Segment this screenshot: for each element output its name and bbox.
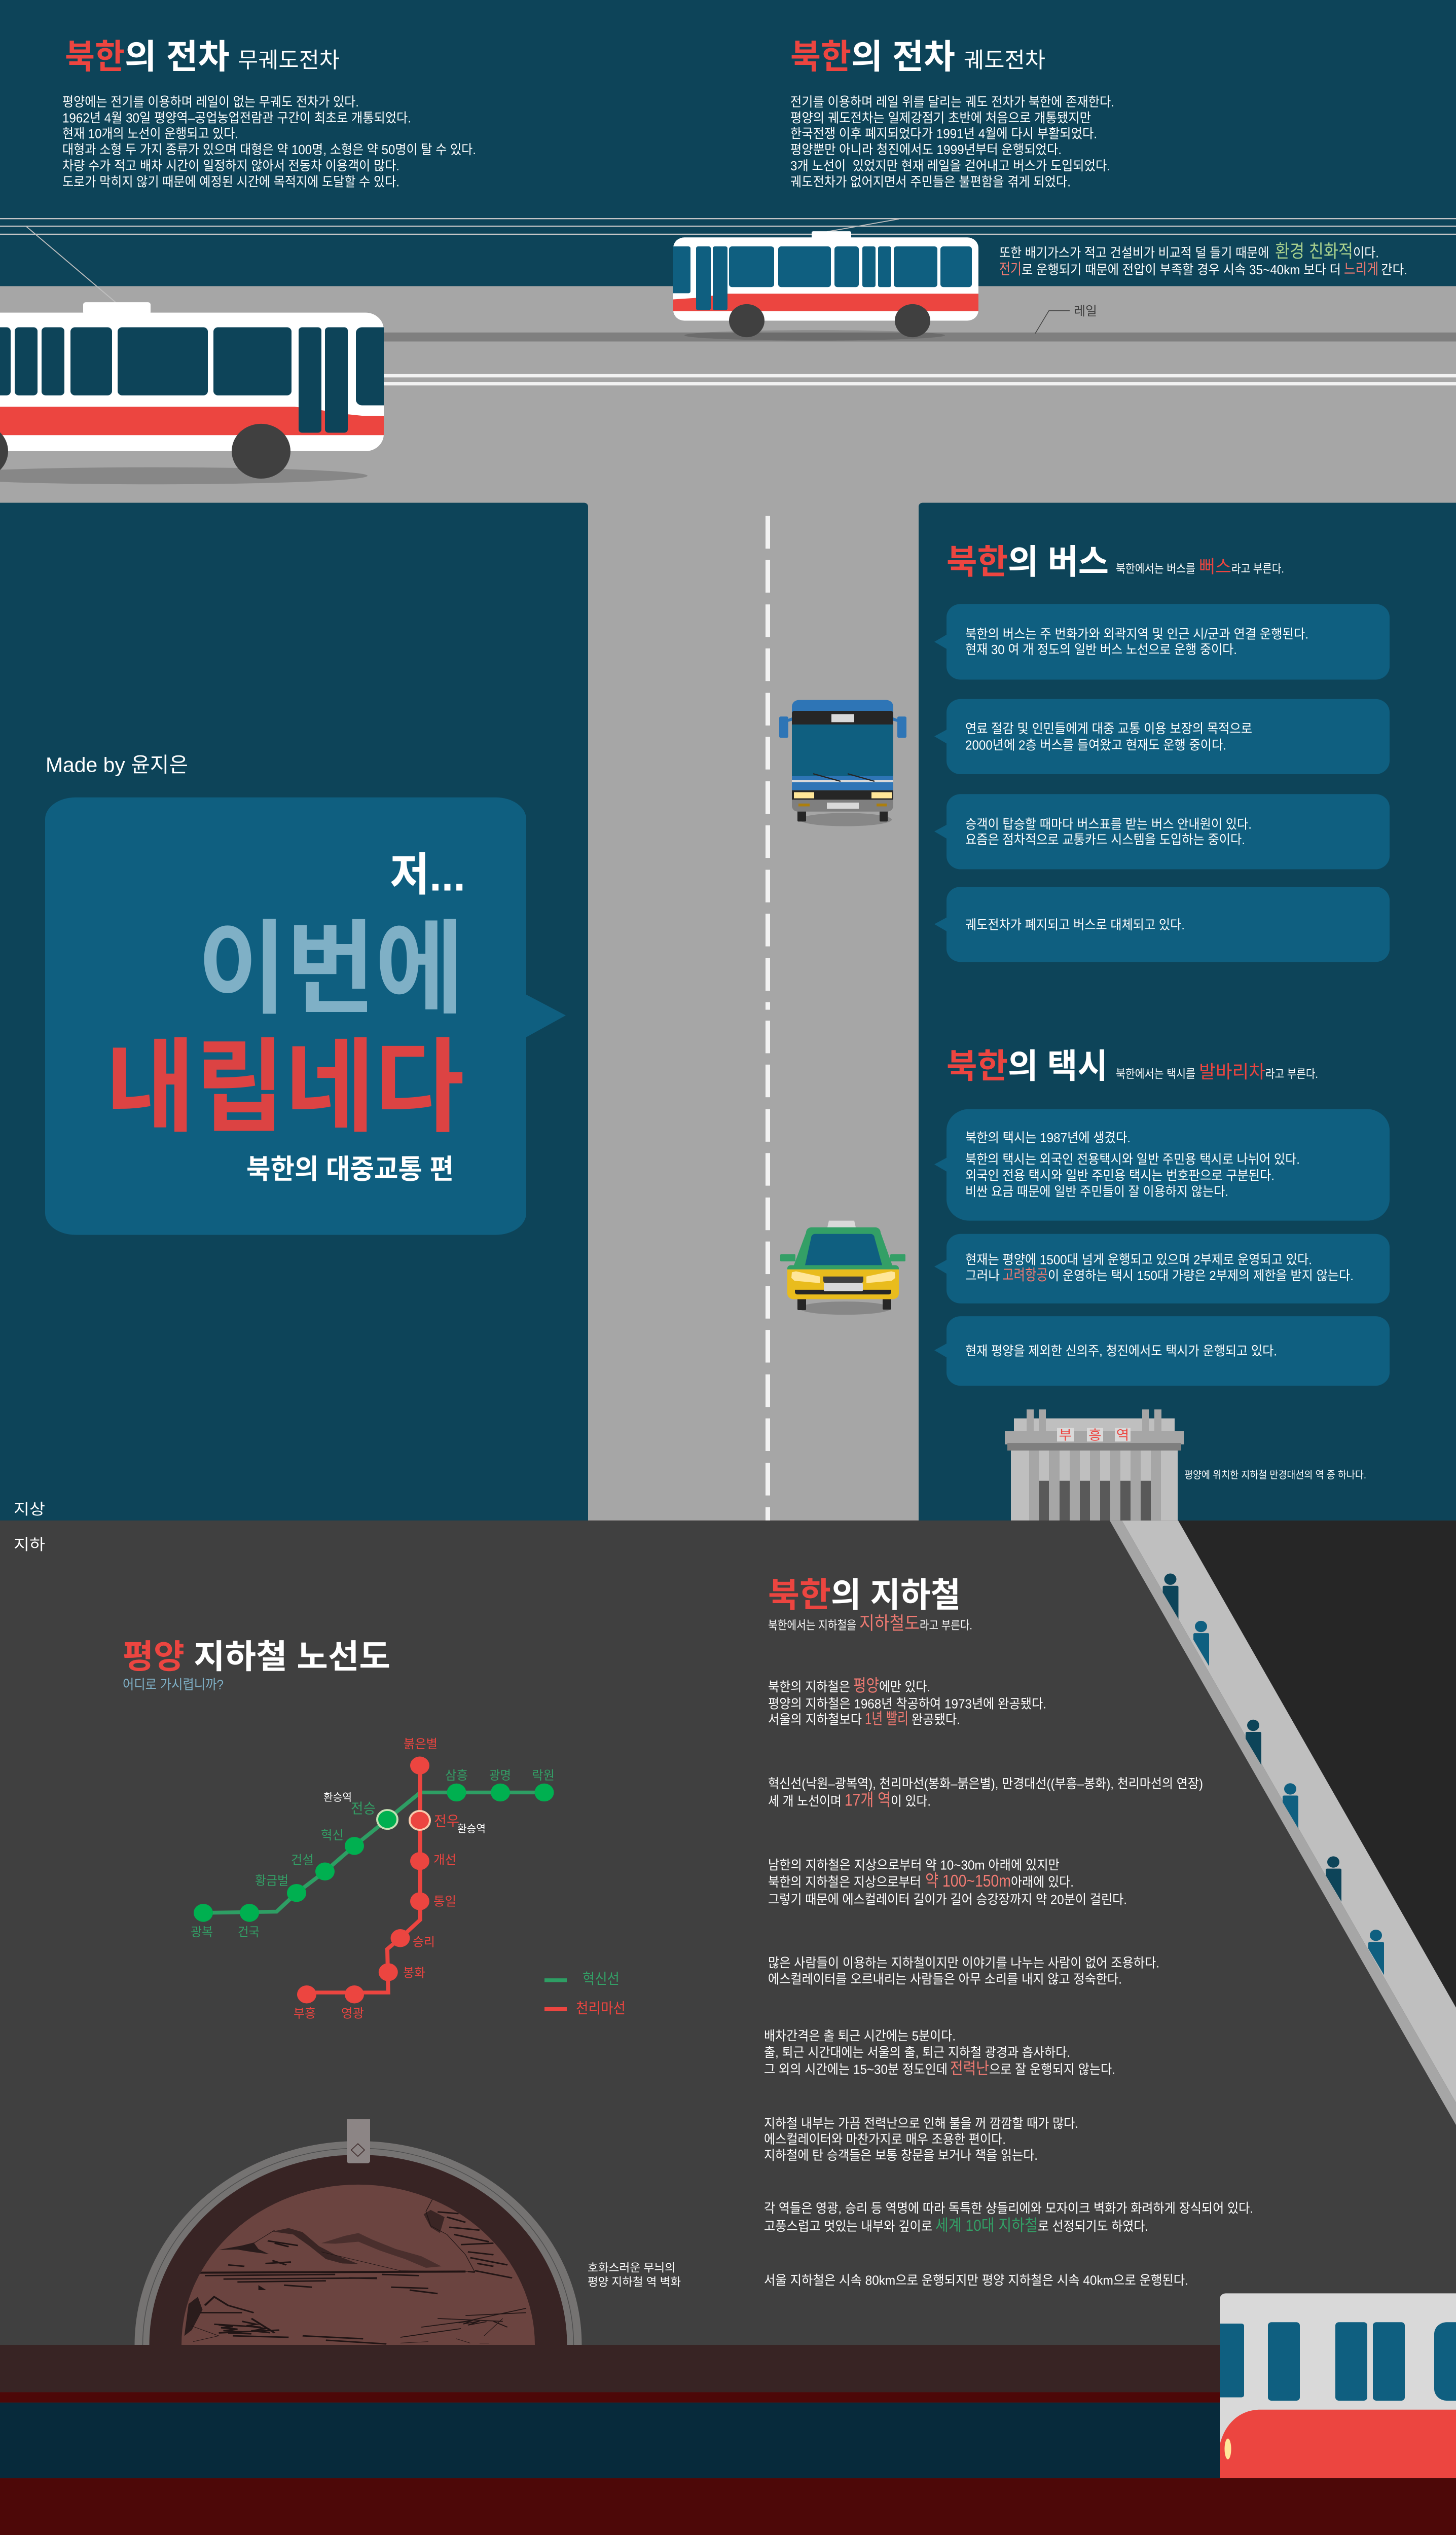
heading: subway map: 어디로 가시렵니까? — [123, 1677, 224, 1692]
top panel: sky background — [0, 0, 1456, 286]
label: rail: 레일 — [1074, 304, 1097, 318]
label: above ground: 지상 — [14, 1501, 45, 1518]
station labels: 락원 — [532, 1769, 555, 1783]
callout: bus 3: 요즘은 점차적으로 교통카드 시스템을 도입하는 중이다. — [965, 832, 1245, 847]
icon: arch keystone — [347, 2119, 370, 2163]
body text: tram: 한국전쟁 이후 폐지되었다가 1991년 4월에 다시 부활되었다. — [790, 126, 1097, 141]
rail strip — [0, 333, 1456, 342]
callout: taxi 1 — [934, 1109, 1390, 1221]
heading: taxi: 라고 부른다. — [1265, 1068, 1318, 1081]
callout: taxi 3 — [934, 1316, 1390, 1386]
text block: interior: 지하철에 탄 승객들은 보통 창문을 보거나 책을 읽는다. — [764, 2148, 1038, 2163]
text block: Pyongyang only — [768, 1676, 1046, 1727]
station labels — [191, 1737, 555, 2020]
body text: tram: 3개 노선이 있었지만 현재 레일을 걷어내고 버스가 도입되었다. — [790, 158, 1110, 173]
heading: subway: 북한에서는 지하철을 — [768, 1619, 856, 1632]
line: Hyeoksin green — [194, 1784, 554, 1922]
callout: taxi 1: 비싼 요금 때문에 일반 주민들이 잘 이용하지 않는다. — [965, 1184, 1228, 1199]
callout: taxi 1: 북한의 택시는 1987년에 생겼다. — [965, 1130, 1131, 1145]
main title: 북한의 대중교통 편 — [246, 1153, 454, 1184]
callout: environment note: 이다. — [1353, 245, 1379, 260]
callout: environment note: 또한 배기가스가 적고 건설비가 비교적 덜 들기 때문에 — [999, 245, 1272, 260]
station labels: 환승역 — [457, 1823, 486, 1835]
main title: 내립네다 — [105, 1031, 464, 1145]
callout: bus 2 — [934, 699, 1390, 774]
callout: bus 4: 궤도전차가 폐지되고 버스로 대체되고 있다. — [965, 917, 1185, 932]
text block: lines: 이 있다. — [891, 1793, 931, 1808]
body text: trackless trolley — [62, 94, 476, 189]
text block: headway: 그 외의 시간에는 15~30분 정도인데 — [764, 2061, 948, 2077]
text block: interior: 에스컬레이터와 마찬가지로 매우 조용한 편이다. — [764, 2131, 1006, 2147]
text block: stations — [764, 2201, 1253, 2234]
text block: headway — [764, 2028, 1115, 2077]
underground background — [0, 1520, 1456, 2535]
station labels: 건설 — [291, 1854, 314, 1867]
heading: subway — [768, 1576, 972, 1633]
station name: 역 — [1116, 1427, 1129, 1442]
station labels: 부흥 — [294, 2007, 316, 2020]
callout: environment note: 로 운행되기 때문에 전압이 부족할 경우 시속 35~40km 보다 더 — [1022, 262, 1341, 277]
text block: depth: 약 100~150m — [925, 1871, 1011, 1891]
callout: bus 2: 2000년에 2층 버스를 들여왔고 현재도 운행 중이다. — [965, 737, 1226, 752]
text block: Pyongyang only: 에만 있다. — [879, 1679, 930, 1694]
heading: trackless trolley: 북한 — [65, 38, 125, 76]
icon: taxi — [780, 1221, 905, 1315]
heading: taxi: 북한 — [947, 1047, 1008, 1085]
text block: depth: 북한의 지하철은 지상으로부터 — [768, 1874, 921, 1890]
callout: environment note: 느리게 — [1344, 261, 1378, 278]
heading: bus: 뻐스 — [1199, 557, 1231, 576]
callout: taxi 2: 이 운영하는 택시 150대 가량은 2부제의 제한을 받지 않는다. — [1048, 1268, 1354, 1283]
callout: taxi 1: 북한의 택시는 외국인 전용택시와 일반 주민용 택시로 나뉘어 있다. — [965, 1152, 1300, 1167]
callout: bus 2: 연료 절감 및 인민들에게 대중 교통 이용 보장의 목적으로 — [965, 721, 1252, 736]
legend: 혁신선 — [583, 1971, 620, 1987]
text block: headway: 출, 퇴근 시간대에는 서울의 출, 퇴근 지하철 광경과 흡사하다. — [764, 2045, 1070, 2060]
caption: mural — [588, 2261, 681, 2288]
credit: Made by 윤지은 — [46, 753, 188, 777]
callout: taxi 2 — [934, 1234, 1390, 1303]
speech bubble — [45, 798, 566, 1235]
caption: mural: 호화스러운 무늬의 — [588, 2261, 675, 2274]
text block: Pyongyang only: 서울의 지하철보다 — [768, 1712, 862, 1727]
heading: subway: 북한 — [768, 1576, 831, 1614]
station name: 부 — [1059, 1427, 1072, 1442]
text block: lines — [768, 1776, 1203, 1809]
text block: headway: 배차간격은 출 퇴근 시간에는 5분이다. — [764, 2028, 956, 2043]
callout: taxi 2: 그러나 — [965, 1268, 1000, 1283]
callout: environment note — [999, 241, 1407, 278]
heading: taxi: 의 택시 — [1008, 1047, 1108, 1085]
main title: 이번에 — [198, 913, 464, 1027]
heading: tram — [790, 38, 1045, 76]
heading: bus: 북한 — [947, 543, 1008, 581]
heading: tram: 의 전차 — [851, 38, 955, 76]
station labels: 전승 — [351, 1801, 376, 1817]
text block: headway: 전력난 — [950, 2059, 989, 2077]
heading: subway map: 지하철 노선도 — [194, 1639, 390, 1676]
icon: Buheung station building — [1005, 1409, 1184, 1520]
heading: tram: 북한 — [790, 38, 851, 76]
legend: 천리마선 — [576, 2001, 626, 2017]
section: tram text — [790, 38, 1114, 189]
road surface — [0, 286, 1456, 1520]
body text: trackless trolley: 차량 수가 적고 배차 시간이 일정하지 않아서 전동차 이용객이 많다. — [62, 158, 399, 173]
callout: environment note: 간다. — [1381, 262, 1407, 277]
body text: trackless trolley: 대형과 소형 두 가지 종류가 있으며 대형은 약 100명, 소형은 약 50명이 탈 수 있다. — [62, 142, 476, 157]
body text: tram: 평양의 궤도전차는 일제강점기 초반에 처음으로 개통됐지만 — [790, 110, 1091, 125]
panel: bus and taxi — [919, 503, 1456, 1520]
callout: bus 1: 현재 30 여 개 정도의 일반 버스 노선으로 운행 중이다. — [965, 642, 1237, 657]
station labels: 삼흥 — [445, 1769, 468, 1783]
callout: taxi 2: 고려항공 — [1002, 1266, 1048, 1284]
text block: depth: 그렇기 때문에 에스컬레이터 길이가 길어 승강장까지 약 20분이 걸린다. — [768, 1892, 1127, 1907]
mural landscape — [185, 2198, 526, 2344]
passengers — [1163, 1574, 1384, 1975]
icon: escalator with passengers — [1110, 1520, 1456, 2125]
heading: subway map — [123, 1639, 390, 1692]
callout: bus 4 — [934, 887, 1390, 962]
icon: large trolleybus — [0, 227, 384, 484]
callout: bus 3: 승객이 탑승할 때마다 버스표를 받는 버스 안내원이 있다. — [965, 816, 1252, 831]
text block: quiet: 에스컬레이터를 오르내리는 사람들은 아무 소리를 내지 않고 정숙한다. — [768, 1971, 1122, 1986]
text block: Pyongyang only: 완공됐다. — [912, 1712, 960, 1727]
body text: tram: 궤도전차가 없어지면서 주민들은 불편함을 겪게 되었다. — [790, 174, 1071, 189]
label: rail — [1035, 304, 1097, 334]
heading: taxi: 발바리차 — [1199, 1062, 1265, 1082]
heading: trackless trolley: 무궤도전차 — [238, 49, 340, 73]
heading: tram: 궤도전차 — [964, 49, 1045, 73]
icon: small tram — [673, 219, 978, 341]
text block: stations: 각 역들은 영광, 승리 등 역명에 따라 독특한 샹들리에와 모자이크 벽화가 화려하게 장식되어 있다. — [764, 2201, 1253, 2216]
callout: environment note: 전기 — [999, 261, 1022, 278]
heading: bus: 라고 부른다. — [1231, 562, 1284, 575]
callout: bus 1 — [934, 604, 1390, 679]
station labels: 황금벌 — [255, 1874, 288, 1888]
chart: subway line map — [191, 1737, 626, 2020]
callout: bus 3 — [934, 794, 1390, 870]
callout: bus 1: 북한의 버스는 주 번화가와 외곽지역 및 인근 시/군과 연결 운행된다. — [965, 626, 1308, 641]
text block: lines: 17개 역 — [845, 1791, 891, 1809]
text block: lines: 세 개 노선이며 — [768, 1793, 842, 1808]
callout: taxi 2: 현재는 평양에 1500대 넘게 운행되고 있으며 2부제로 운영되고 있다. — [965, 1252, 1312, 1267]
heading: subway map: 평양 — [123, 1639, 185, 1676]
text block: stations: 세계 10대 지하철 — [935, 2216, 1038, 2234]
body text: tram — [790, 94, 1114, 189]
text block: Pyongyang only: 평양 — [853, 1676, 879, 1695]
station labels: 봉화 — [403, 1966, 425, 1980]
text block: stations: 고풍스럽고 멋있는 내부와 깊이로 — [764, 2219, 932, 2234]
panel: left title — [0, 503, 588, 1520]
text block: interior — [764, 2116, 1078, 2163]
station labels: 혁신 — [321, 1829, 344, 1842]
caption: mural: 평양 지하철 역 벽화 — [588, 2275, 681, 2288]
callout: taxi 3: 현재 평양을 제외한 신의주, 청진에서도 택시가 운행되고 있다. — [965, 1343, 1277, 1358]
text block: stations: 로 선정되기도 하였다. — [1038, 2219, 1148, 2234]
text block: depth: 아래에 있다. — [1011, 1874, 1074, 1890]
text block: quiet — [768, 1955, 1159, 1986]
text block: lines: 혁신선(낙원–광복역), 천리마선(봉화–붉은별), 만경대선((부흥–봉화), 천리마선의 연장) — [768, 1776, 1203, 1791]
icon: bus — [779, 700, 906, 826]
heading: trackless trolley — [65, 38, 340, 76]
station labels: 개선 — [433, 1853, 456, 1867]
main title: 저... — [390, 849, 465, 900]
callout: environment note: 환경 친화적 — [1275, 241, 1353, 261]
illustration: station mural arch — [135, 2141, 582, 2345]
text block: Pyongyang only: 1년 빨리 — [865, 1710, 908, 1727]
heading: taxi: 북한에서는 택시를 — [1116, 1068, 1195, 1081]
body text: trackless trolley: 1962년 4월 30일 평양역–공업농업전람관 구간이 최초로 개통되었다. — [62, 110, 411, 125]
heading: bus: 의 버스 — [1008, 543, 1109, 581]
text block: headway: 으로 잘 운행되지 않는다. — [989, 2061, 1115, 2077]
center lane dashes — [766, 516, 770, 1520]
heading: taxi — [947, 1047, 1318, 1085]
station labels: 광복 — [191, 1926, 213, 1939]
heading: bus — [947, 543, 1284, 581]
callout: taxi 1: 외국인 전용 택시와 일반 주민용 택시는 번호판으로 구분된다. — [965, 1168, 1275, 1183]
station labels: 통일 — [433, 1895, 456, 1908]
heading: subway: 의 지하철 — [831, 1576, 961, 1614]
overhead wires — [0, 218, 1456, 235]
station labels: 환승역 — [323, 1792, 352, 1803]
icon: subway train — [1220, 2293, 1456, 2478]
station labels: 광명 — [489, 1769, 511, 1783]
text block: depth — [768, 1857, 1127, 1907]
station labels: 건국 — [238, 1926, 260, 1939]
text block: interior: 지하철 내부는 가끔 전력난으로 인해 불을 꺼 깜깜할 때가 많다. — [764, 2116, 1078, 2131]
text block: Pyongyang only: 북한의 지하철은 — [768, 1679, 850, 1694]
heading: subway: 지하철도 — [859, 1613, 920, 1633]
text block: quiet: 많은 사람들이 이용하는 지하철이지만 이야기를 나누는 사람이 없어 조용하다. — [768, 1955, 1159, 1970]
heading: subway: 라고 부른다. — [920, 1619, 972, 1632]
legend — [544, 1971, 626, 2017]
body text: tram: 평양뿐만 아니라 청진에서도 1999년부터 운행되었다. — [790, 142, 1062, 157]
label: below ground: 지하 — [14, 1536, 45, 1553]
heading: bus: 북한에서는 버스를 — [1116, 562, 1195, 575]
text block: Pyongyang only: 평양의 지하철은 1968년 착공하여 1973년에 완공됐다. — [768, 1696, 1046, 1711]
station labels: 전우 — [434, 1814, 459, 1829]
section: trackless trolley text — [62, 38, 476, 189]
station name: 흥 — [1088, 1427, 1102, 1442]
station labels: 승리 — [413, 1935, 435, 1949]
text block: speed: 서울 지하철은 시속 80km으로 운행되지만 평양 지하철은 시속 40km으로 운행된다. — [764, 2272, 1188, 2288]
station labels: 영광 — [341, 2007, 364, 2020]
main title — [105, 849, 465, 1184]
station name — [1059, 1427, 1129, 1442]
section: subway text — [764, 1576, 1253, 2288]
station labels: 붉은별 — [404, 1737, 438, 1751]
body text: tram: 전기를 이용하며 레일 위를 달리는 궤도 전차가 북한에 존재한다. — [790, 94, 1114, 110]
text block: depth: 남한의 지하철은 지상으로부터 약 10~30m 아래에 있지만 — [768, 1857, 1060, 1872]
body text: trackless trolley: 현재 10개의 노선이 운행되고 있다. — [62, 126, 238, 141]
caption: station: 평양에 위치한 지하철 만경대선의 역 중 하나다. — [1184, 1469, 1366, 1481]
road lines — [0, 374, 1456, 385]
bottom platform bands — [0, 2345, 1456, 2535]
body text: trackless trolley: 도로가 막히지 않기 때문에 예정된 시간에 목적지에 도달할 수 있다. — [62, 174, 399, 189]
body text: trackless trolley: 평양에는 전기를 이용하며 레일이 없는 무궤도 전차가 있다. — [62, 94, 359, 110]
line: Chollima red — [297, 1757, 430, 2003]
heading: trackless trolley: 의 전차 — [125, 38, 230, 76]
